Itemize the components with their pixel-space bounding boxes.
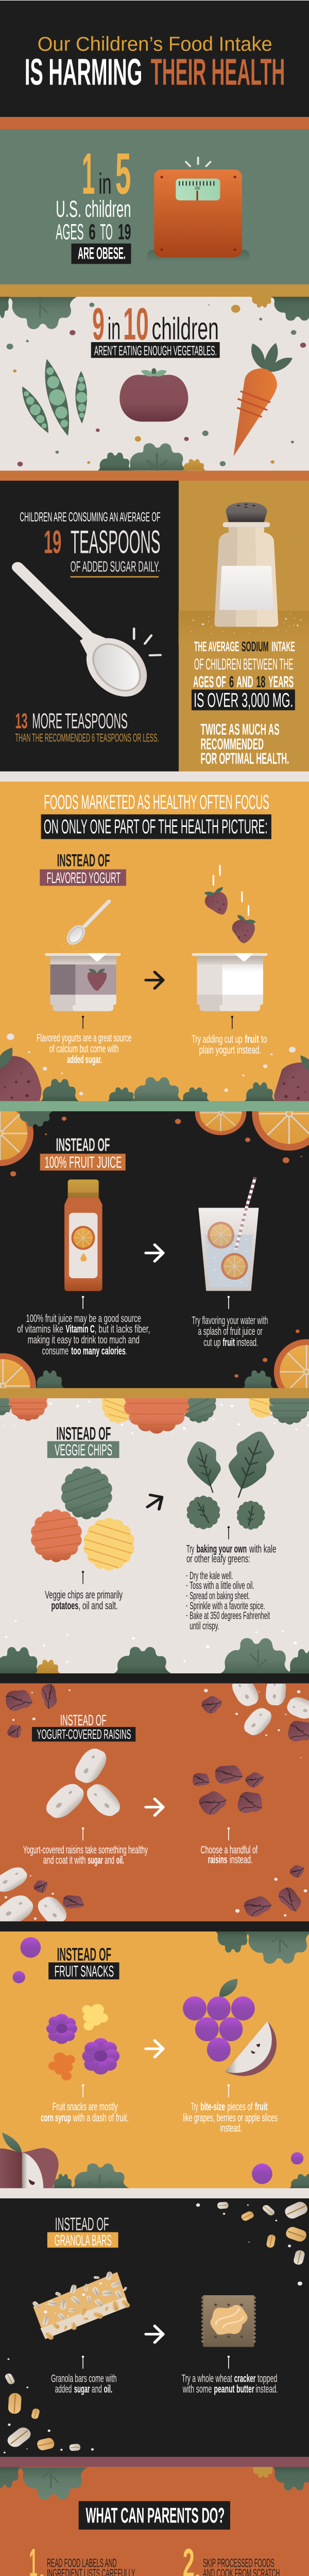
text: bake your own: baking your own	[197, 1543, 247, 1555]
marker pins	[82, 2084, 230, 2097]
stat text: 9 in 10 children: in	[108, 311, 121, 346]
decoration: bushes and dots	[0, 1620, 309, 1673]
text: granola caption	[51, 2372, 117, 2395]
panel: granola bars: instead.	[255, 2382, 278, 2395]
panel: 1 in 5 obese: 5	[115, 141, 131, 206]
decoration: bushes and berries	[0, 1047, 309, 1101]
title: IS HARMING	[25, 52, 142, 93]
text: flavored water caption	[192, 1314, 268, 1348]
text: veggie chips caption: Veggie chips are primarily	[45, 1588, 123, 1601]
panel: flavored yogurt: FLAVORED YOGURT	[47, 869, 121, 887]
stat text: 9 in 10 children: 9	[92, 299, 105, 350]
icon: pea pods	[22, 359, 87, 436]
text: raisins caption: instead.	[230, 1853, 253, 1866]
marker pins	[82, 2355, 230, 2369]
decoration: lower oats	[4, 2424, 94, 2453]
text: juice caption: making it easy to drink too much and	[28, 1333, 140, 1346]
panel: sugar and sodium	[0, 481, 309, 772]
text: add fruit caption: fruit	[245, 1032, 259, 1045]
text: flavored yogurt caption: added sugar.	[67, 1053, 102, 1065]
text: 13 more teaspoons	[15, 713, 159, 742]
title: Our Children’s Food Intake	[38, 32, 272, 55]
heading: instead of fruit juice: INSTEAD OF	[56, 1134, 110, 1155]
text: 19 teaspoons of added sugar: 19	[44, 524, 61, 560]
decoration: salt specks	[191, 613, 301, 634]
panel: fruit juice	[0, 1111, 309, 1388]
panel: yogurt raisins: YOGURT-COVERED RAISINS	[37, 1727, 131, 1742]
text: raisins caption: raisins	[208, 1853, 227, 1866]
text: bite-size fruit caption: fruit	[255, 2100, 268, 2113]
stat text: 9 in 10 children: children	[152, 311, 219, 346]
text: sodium intake	[192, 639, 295, 767]
panel: sugar and sodium: OF ADDED SUGAR DAILY.	[71, 558, 160, 575]
text: juice caption: , but it lacks fiber,	[95, 1323, 150, 1335]
icon: spoon with sugar	[62, 901, 109, 953]
text: sodium intake: AGES OF	[193, 673, 226, 691]
decoration: oranges and bushes	[0, 1339, 309, 1418]
text: yogurt raisins caption	[23, 1843, 148, 1866]
text: fruit snacks caption: Fruit snacks are mostly	[53, 2100, 118, 2113]
heading: instead of flavored yogurt	[40, 854, 126, 886]
text: juice caption: Vitamin C	[65, 1323, 95, 1335]
icon: fruit snack gummies	[46, 2004, 119, 2080]
panel: yogurt raisins: Yogurt-covered raisins take something healthy	[23, 1843, 148, 1856]
text: sodium intake: THE AVERAGE	[194, 639, 239, 655]
text: add fruit caption: Try adding cut up	[192, 1032, 243, 1045]
icon: arrow	[146, 1245, 163, 1261]
heading: instead of granola bars: INSTEAD OF	[55, 2214, 109, 2234]
text: fruit snacks caption: with a dash of fruit.	[73, 2111, 129, 2124]
icon: spoon	[18, 567, 161, 707]
stat text: 1 in 5: AGES	[56, 219, 84, 244]
tip 1 text: READ FOOD LABELS AND	[47, 2556, 117, 2570]
text: sodium intake: 18	[256, 673, 265, 691]
text: flavored yogurt caption	[37, 1031, 131, 1065]
text: juice caption: of vitamins like	[17, 1323, 63, 1335]
text: flavored water caption: instead.	[236, 1336, 258, 1348]
decoration: scattered dots	[7, 302, 306, 466]
text: bake your own: or other leafy greens:	[186, 1552, 250, 1565]
panel: granola bars	[0, 2198, 309, 2457]
text: bake your own	[186, 1543, 276, 1565]
heading: instead of fruit snacks	[48, 1944, 119, 1980]
icon: arrow	[146, 2326, 163, 2343]
text: bite-size fruit caption: instead.	[220, 2122, 242, 2134]
heading: instead of yogurt-covered raisins	[32, 1711, 135, 1742]
text: add fruit caption: to	[261, 1032, 267, 1045]
stat text: 9 in 10 children	[91, 308, 220, 358]
title	[25, 32, 285, 93]
text: add fruit caption	[192, 1032, 267, 1056]
decoration: lower raisins	[0, 1863, 307, 1930]
icon: salt shaker	[179, 502, 309, 645]
stat text: 1 in 5	[56, 141, 131, 264]
panel: granola bars: Granola bars come with	[51, 2372, 117, 2384]
panel: title header	[0, 1, 309, 117]
text: raisins caption	[201, 1843, 258, 1866]
decoration: hanging bushes	[0, 2467, 309, 2500]
panel: 1 in 5 obese: 19	[118, 219, 131, 244]
text: cracker caption: Try a whole wheat	[182, 2372, 232, 2384]
text: cracker caption: topped	[258, 2372, 277, 2384]
text: juice caption: consume	[42, 1344, 68, 1357]
panel: veggie chips: INSTEAD OF	[56, 1424, 111, 1444]
panel: granola bars: GRANOLA BARS	[55, 2231, 112, 2249]
text: cracker caption: cracker	[234, 2372, 255, 2384]
icon: granola bar	[31, 2271, 131, 2341]
stat text: 1 in 5: 1	[82, 141, 95, 206]
text: flavored yogurt caption: of calcium but come with	[49, 1042, 118, 1055]
icon: kale leaves	[187, 1432, 274, 1530]
text: fruit snacks caption: corn syrup	[41, 2111, 71, 2124]
text: cracker caption: with some	[182, 2382, 212, 2395]
text: yogurt raisins caption: oil.	[116, 1854, 124, 1866]
text: cracker caption	[182, 2372, 278, 2395]
text: granola caption: sugar	[74, 2382, 90, 2395]
text: bite-size fruit caption: Try	[191, 2100, 198, 2113]
text: sodium intake: 6	[229, 673, 234, 691]
decoration: light dots	[7, 1033, 296, 1071]
panel: 9 in 10 vegetables	[0, 297, 309, 471]
text: flavored water caption: cut up	[203, 1336, 221, 1348]
text: veggie chips caption: , oil and salt.	[78, 1599, 118, 1612]
icon: flavored yogurt cup	[45, 953, 121, 1011]
heading: instead of yogurt-covered raisins: INSTEAD OF	[60, 1711, 107, 1729]
stat text: 1 in 5: in	[98, 167, 112, 200]
icon: cracker with peanut butter	[203, 2295, 254, 2347]
text: juice caption	[17, 1312, 150, 1357]
list: baking steps	[186, 1570, 270, 1632]
heading: instead of fruit juice	[40, 1138, 126, 1171]
heading: instead of flavored yogurt: INSTEAD OF	[57, 851, 110, 870]
text: bite-size fruit caption: bite-size	[200, 2100, 225, 2113]
icon: plain yogurt cup	[192, 953, 268, 1011]
panel: 1 in 5 obese	[0, 129, 309, 284]
text: 19 teaspoons of added sugar	[44, 530, 160, 578]
tip 1 text	[29, 2540, 136, 2576]
icon: arrow	[146, 1799, 163, 1816]
text: veggie chips caption: potatoes	[51, 1599, 78, 1612]
stat text: 1 in 5: 6	[89, 219, 96, 244]
text: sodium intake: AND	[236, 673, 253, 691]
decoration: scattered oats	[4, 2200, 309, 2419]
panel: yogurt raisins	[0, 1674, 309, 1930]
icon: glass of fruit water	[198, 1177, 259, 1291]
text: juice caption: 100% fruit juice may be a good source	[26, 1312, 141, 1325]
text: granola caption: oil.	[104, 2382, 112, 2395]
text: yogurt raisins caption: sugar	[88, 1854, 103, 1866]
text: juice caption: .	[126, 1344, 127, 1357]
marker pins	[82, 1827, 230, 1840]
panel: 1 in 5 obese: U.S. children	[56, 196, 131, 222]
decoration: grapes and hanging bushes	[12, 1931, 309, 1984]
panel: fruit snacks: INSTEAD OF	[57, 1944, 111, 1964]
icon: bathroom scale	[147, 158, 249, 262]
marker pins	[82, 1526, 230, 1584]
text: sodium intake: SODIUM	[242, 639, 269, 655]
heading: instead of veggie chips	[47, 1424, 119, 1459]
list: baking steps: Dry the kale well.	[190, 1570, 233, 1582]
icon: arrow	[146, 2041, 163, 2057]
text: 13 more teaspoons: MORE TEASPOONS	[32, 709, 128, 733]
list: baking steps: until crispy.	[190, 1620, 219, 1632]
text: juice caption: too many calories	[71, 1344, 126, 1357]
decoration: leafy bushes	[0, 297, 309, 470]
decoration: raisins and yogurt raisins	[5, 1674, 309, 1879]
text: granola caption: and	[92, 2382, 102, 2395]
panel: flavored yogurt: Flavored yogurts are a great source	[37, 1031, 131, 1044]
icon: raisins	[192, 1765, 267, 1818]
stat text: 1 in 5: TO	[100, 219, 113, 244]
text: bite-size fruit caption: pieces of	[228, 2100, 253, 2113]
heading: foods marketed as healthy	[41, 791, 271, 839]
text: flavored water caption: fruit	[222, 1336, 235, 1348]
tip 2 text	[183, 2540, 280, 2576]
icon: arrow	[147, 1495, 162, 1509]
icon: veggie chips	[31, 1466, 134, 1571]
text: granola caption: added	[55, 2382, 72, 2395]
panel: veggie chips: VEGGIE CHIPS	[55, 1441, 112, 1459]
panel: fruit snacks: FRUIT SNACKS	[55, 1962, 114, 1980]
text: fruit snacks caption	[41, 2100, 129, 2124]
icon: yogurt-covered raisins	[41, 1745, 125, 1822]
text: yogurt raisins caption: and	[105, 1854, 114, 1866]
decoration: orange slices	[0, 1077, 309, 1333]
panel: fruit juice: 100% FRUIT JUICE	[44, 1154, 122, 1172]
panel: fruit snacks	[0, 1931, 309, 2189]
marker pins	[82, 1296, 230, 1309]
icon: tomato	[119, 368, 188, 421]
text: veggie chips caption	[45, 1588, 123, 1612]
icon: juice bottle	[64, 1179, 102, 1291]
panel: 1 in 5 obese: ARE OBESE.	[78, 244, 126, 263]
icon: carrot	[233, 343, 293, 456]
panel: sugar and sodium: TEASPOONS	[71, 524, 160, 560]
text: bake your own: with kale	[249, 1543, 276, 1555]
decoration: hanging chips	[0, 1371, 309, 1435]
text: cracker caption: peanut butter	[214, 2382, 254, 2395]
text: 13 more teaspoons: 13	[15, 709, 28, 733]
panel: flavored yogurt	[0, 782, 309, 1101]
icon: arrow	[146, 972, 163, 988]
decoration: apple, bushes and grapes	[0, 2132, 309, 2188]
panel: what can parents do	[0, 2467, 309, 2576]
heading: instead of granola bars	[47, 2214, 118, 2249]
icon: bathroom scale: 260	[195, 186, 200, 191]
heading: what can parents do	[79, 2501, 230, 2530]
text: yogurt raisins caption: and coat it with	[43, 1854, 85, 1866]
text: bite-size fruit caption	[183, 2100, 278, 2134]
icon: grapes and apple slice	[183, 1979, 277, 2076]
text: bake your own: Try	[186, 1543, 194, 1555]
marker pins	[82, 1016, 233, 1029]
stat text: 9 in 10 children: 10	[123, 299, 149, 350]
panel: veggie chips	[0, 1371, 309, 1673]
icon: falling strawberries	[203, 866, 256, 944]
